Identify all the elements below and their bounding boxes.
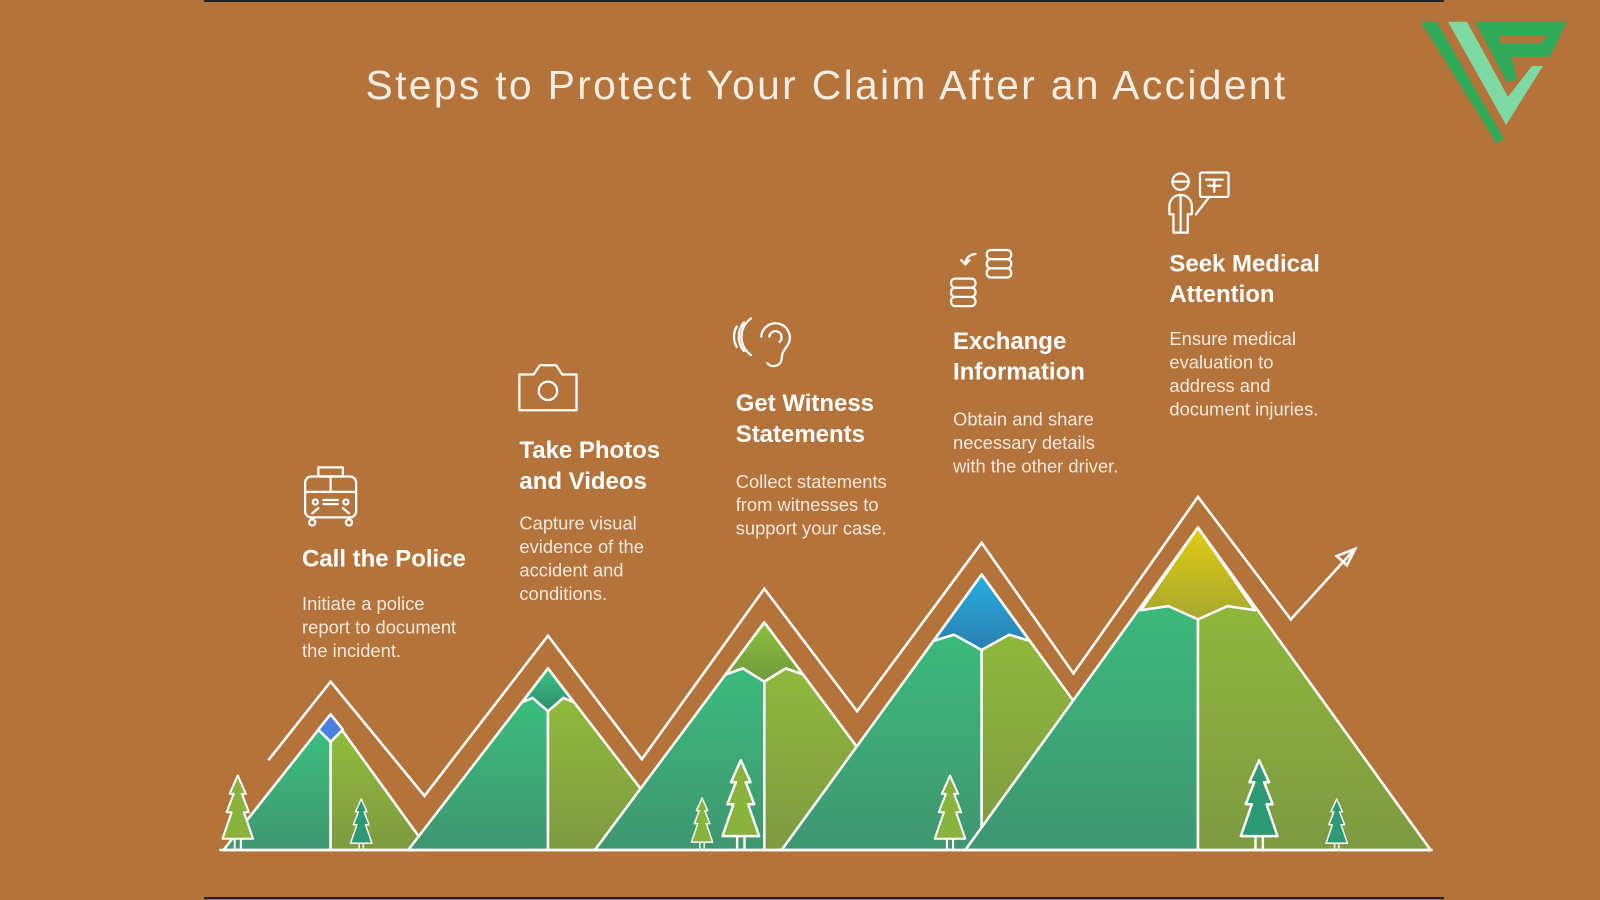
- heading: Take Photos: [519, 437, 660, 464]
- title: Steps to Protect Your Claim After an Accident: [366, 62, 1288, 108]
- logo: [1421, 22, 1567, 143]
- description: Capture visual: [519, 513, 637, 534]
- heading: Seek Medical: [1169, 250, 1320, 277]
- mountain 3: [595, 622, 934, 850]
- mountain 4: [782, 574, 1182, 850]
- step 3: witness statements: [734, 318, 887, 539]
- description: necessary details: [953, 432, 1095, 453]
- icon: doctor with x-ray: [1169, 172, 1229, 233]
- step 4: exchange information: [951, 250, 1118, 476]
- description: from witnesses to: [736, 494, 879, 515]
- description: report to document: [302, 617, 456, 638]
- description: Collect statements: [736, 471, 887, 492]
- step 1: call the police: [302, 467, 466, 661]
- heading: Statements: [736, 421, 865, 448]
- step 2: take photos: [519, 365, 660, 604]
- description: the incident.: [302, 640, 401, 661]
- heading: and Videos: [519, 468, 647, 495]
- trees: [222, 760, 1347, 850]
- heading: Information: [953, 359, 1085, 386]
- description: Ensure medical: [1169, 328, 1296, 349]
- step 5: seek medical attention: [1169, 172, 1320, 419]
- description: evidence of the: [519, 536, 644, 557]
- description: support your case.: [736, 518, 887, 539]
- icon: police truck: [305, 467, 356, 526]
- heading: Call the Police: [302, 545, 466, 572]
- icon: camera: [519, 365, 577, 410]
- description: conditions.: [519, 583, 607, 604]
- mountain 5: [965, 528, 1431, 850]
- description: Obtain and share: [953, 409, 1094, 430]
- mountain 2: [408, 668, 688, 850]
- heading: Attention: [1169, 281, 1275, 308]
- icon: database exchange: [951, 250, 1011, 306]
- zigzag arrow line: [268, 497, 1355, 796]
- mountains: [219, 528, 1433, 850]
- description: with the other driver.: [952, 455, 1118, 476]
- heading: Get Witness: [736, 390, 874, 417]
- description: evaluation to: [1169, 351, 1274, 372]
- icon: ear: [734, 318, 790, 366]
- description: address and: [1169, 375, 1270, 396]
- mountain 1: [223, 714, 429, 850]
- description: accident and: [519, 560, 624, 581]
- description: document injuries.: [1169, 398, 1318, 419]
- description: Initiate a police: [302, 593, 425, 614]
- heading: Exchange: [953, 328, 1066, 355]
